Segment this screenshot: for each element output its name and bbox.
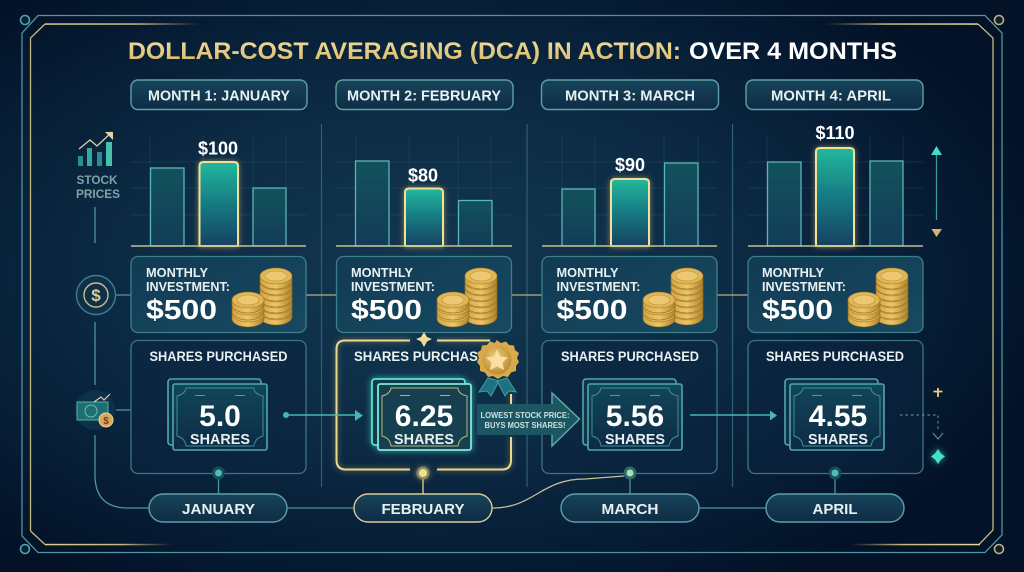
panel: April shares — [748, 340, 923, 474]
timeline node: April — [828, 466, 842, 480]
timeline pill: January — [149, 494, 287, 522]
panel: February investment — [336, 256, 512, 332]
icon: cash with dollar coin — [75, 390, 115, 430]
chart: March: $90 — [615, 155, 645, 175]
panel: March investment: $500 — [556, 294, 628, 325]
month header: January: MONTH 1: JANUARY — [148, 88, 290, 104]
panel: January shares: SHARES — [190, 432, 250, 448]
icon: sparkle above highlighted panel — [416, 332, 432, 347]
label: stock prices — [76, 173, 120, 201]
timeline pill: February: FEBRUARY — [382, 502, 465, 518]
month header: January — [131, 80, 307, 110]
panel: April shares: SHARES — [808, 432, 868, 448]
callout arrow: lowest stock price — [477, 393, 580, 446]
panel: January investment: $500 — [146, 294, 217, 325]
title: OVER 4 MONTHS — [689, 38, 897, 65]
icon: stock prices chart — [78, 132, 113, 166]
icon: award medal — [477, 340, 519, 396]
timeline pill: February — [354, 494, 492, 522]
panel: March shares: SHARES PURCHASED — [561, 349, 699, 364]
panel: April investment — [748, 256, 923, 332]
panel: April investment: INVESTMENT: — [762, 280, 846, 294]
panel: January shares: SHARES PURCHASED — [150, 349, 288, 364]
continuation marks — [900, 388, 945, 464]
gold stem: February — [422, 479, 424, 494]
panel: January investment — [131, 256, 306, 332]
callout arrow: lowest stock price: LOWEST STOCK PRICE: — [480, 411, 570, 420]
icon: dollar coin circle: $ — [91, 286, 101, 305]
panel: March investment: INVESTMENT: — [556, 280, 640, 294]
chart: April — [748, 123, 923, 246]
timeline node: January — [212, 466, 225, 480]
arrow: March to April — [690, 410, 777, 420]
panel: February shares highlighted: SHARES PURCHAS — [354, 349, 478, 364]
timeline pill: January: JANUARY — [182, 502, 255, 518]
month header: April: MONTH 4: APRIL — [771, 88, 891, 104]
column dividers — [322, 124, 732, 487]
chart: February — [336, 135, 512, 246]
panel: March shares: SHARES — [605, 432, 665, 448]
panel: January shares: 5.0 — [199, 400, 241, 433]
panel: February shares highlighted: SHARES — [394, 432, 454, 448]
panel: February shares highlighted — [336, 340, 511, 470]
title: DOLLAR-COST AVERAGING (DCA) IN ACTION: — [128, 38, 681, 65]
chart: January — [131, 135, 306, 246]
price range arrow — [931, 146, 942, 237]
month header: March — [542, 80, 718, 110]
month header: April — [746, 80, 923, 110]
panel: February shares highlighted: 6.25 — [395, 400, 453, 433]
chart: April: $110 — [815, 123, 855, 143]
timeline pill: March: MARCH — [602, 502, 658, 518]
panel: April shares: 4.55 — [809, 400, 867, 433]
panel: February investment: MONTHLY — [351, 266, 414, 280]
title — [128, 38, 897, 65]
panel: March investment: MONTHLY — [556, 266, 619, 280]
timeline curve: February to March — [492, 476, 624, 508]
callout arrow: lowest stock price: BUYS MOST SHARES! — [484, 421, 566, 430]
panel: April investment: $500 — [762, 294, 833, 325]
left timeline connectors — [95, 207, 149, 508]
panel: January investment: INVESTMENT: — [146, 280, 230, 294]
timeline node: February — [416, 466, 430, 480]
timeline connectors — [218, 479, 835, 508]
panel: January shares — [131, 340, 306, 474]
label: stock prices: STOCK — [76, 173, 118, 187]
icon: dollar coin circle — [76, 276, 116, 314]
timeline pill: April: APRIL — [812, 502, 858, 518]
panel: March shares — [542, 340, 717, 474]
panel: February investment: INVESTMENT: — [351, 280, 435, 294]
timeline pill: April — [766, 494, 904, 522]
chart: February: $80 — [408, 166, 438, 186]
label: stock prices: PRICES — [76, 187, 120, 201]
panel: January investment: MONTHLY — [146, 266, 209, 280]
panel: April shares: SHARES PURCHASED — [766, 349, 904, 364]
investment connectors — [306, 294, 748, 296]
chart: March — [542, 135, 717, 246]
timeline pill: March — [561, 494, 699, 522]
icon: cash with dollar coin: $ — [103, 416, 109, 427]
panel: April investment: MONTHLY — [762, 266, 825, 280]
panel: March investment — [542, 256, 717, 332]
month header: March: MONTH 3: MARCH — [565, 88, 695, 104]
month header: February — [336, 80, 513, 110]
chart: January: $100 — [198, 138, 238, 158]
month header: February: MONTH 2: FEBRUARY — [347, 88, 501, 104]
panel: February investment: $500 — [351, 294, 422, 325]
timeline node: March — [624, 466, 636, 480]
arrow: January to February — [283, 410, 363, 421]
panel: March shares: 5.56 — [606, 400, 664, 433]
